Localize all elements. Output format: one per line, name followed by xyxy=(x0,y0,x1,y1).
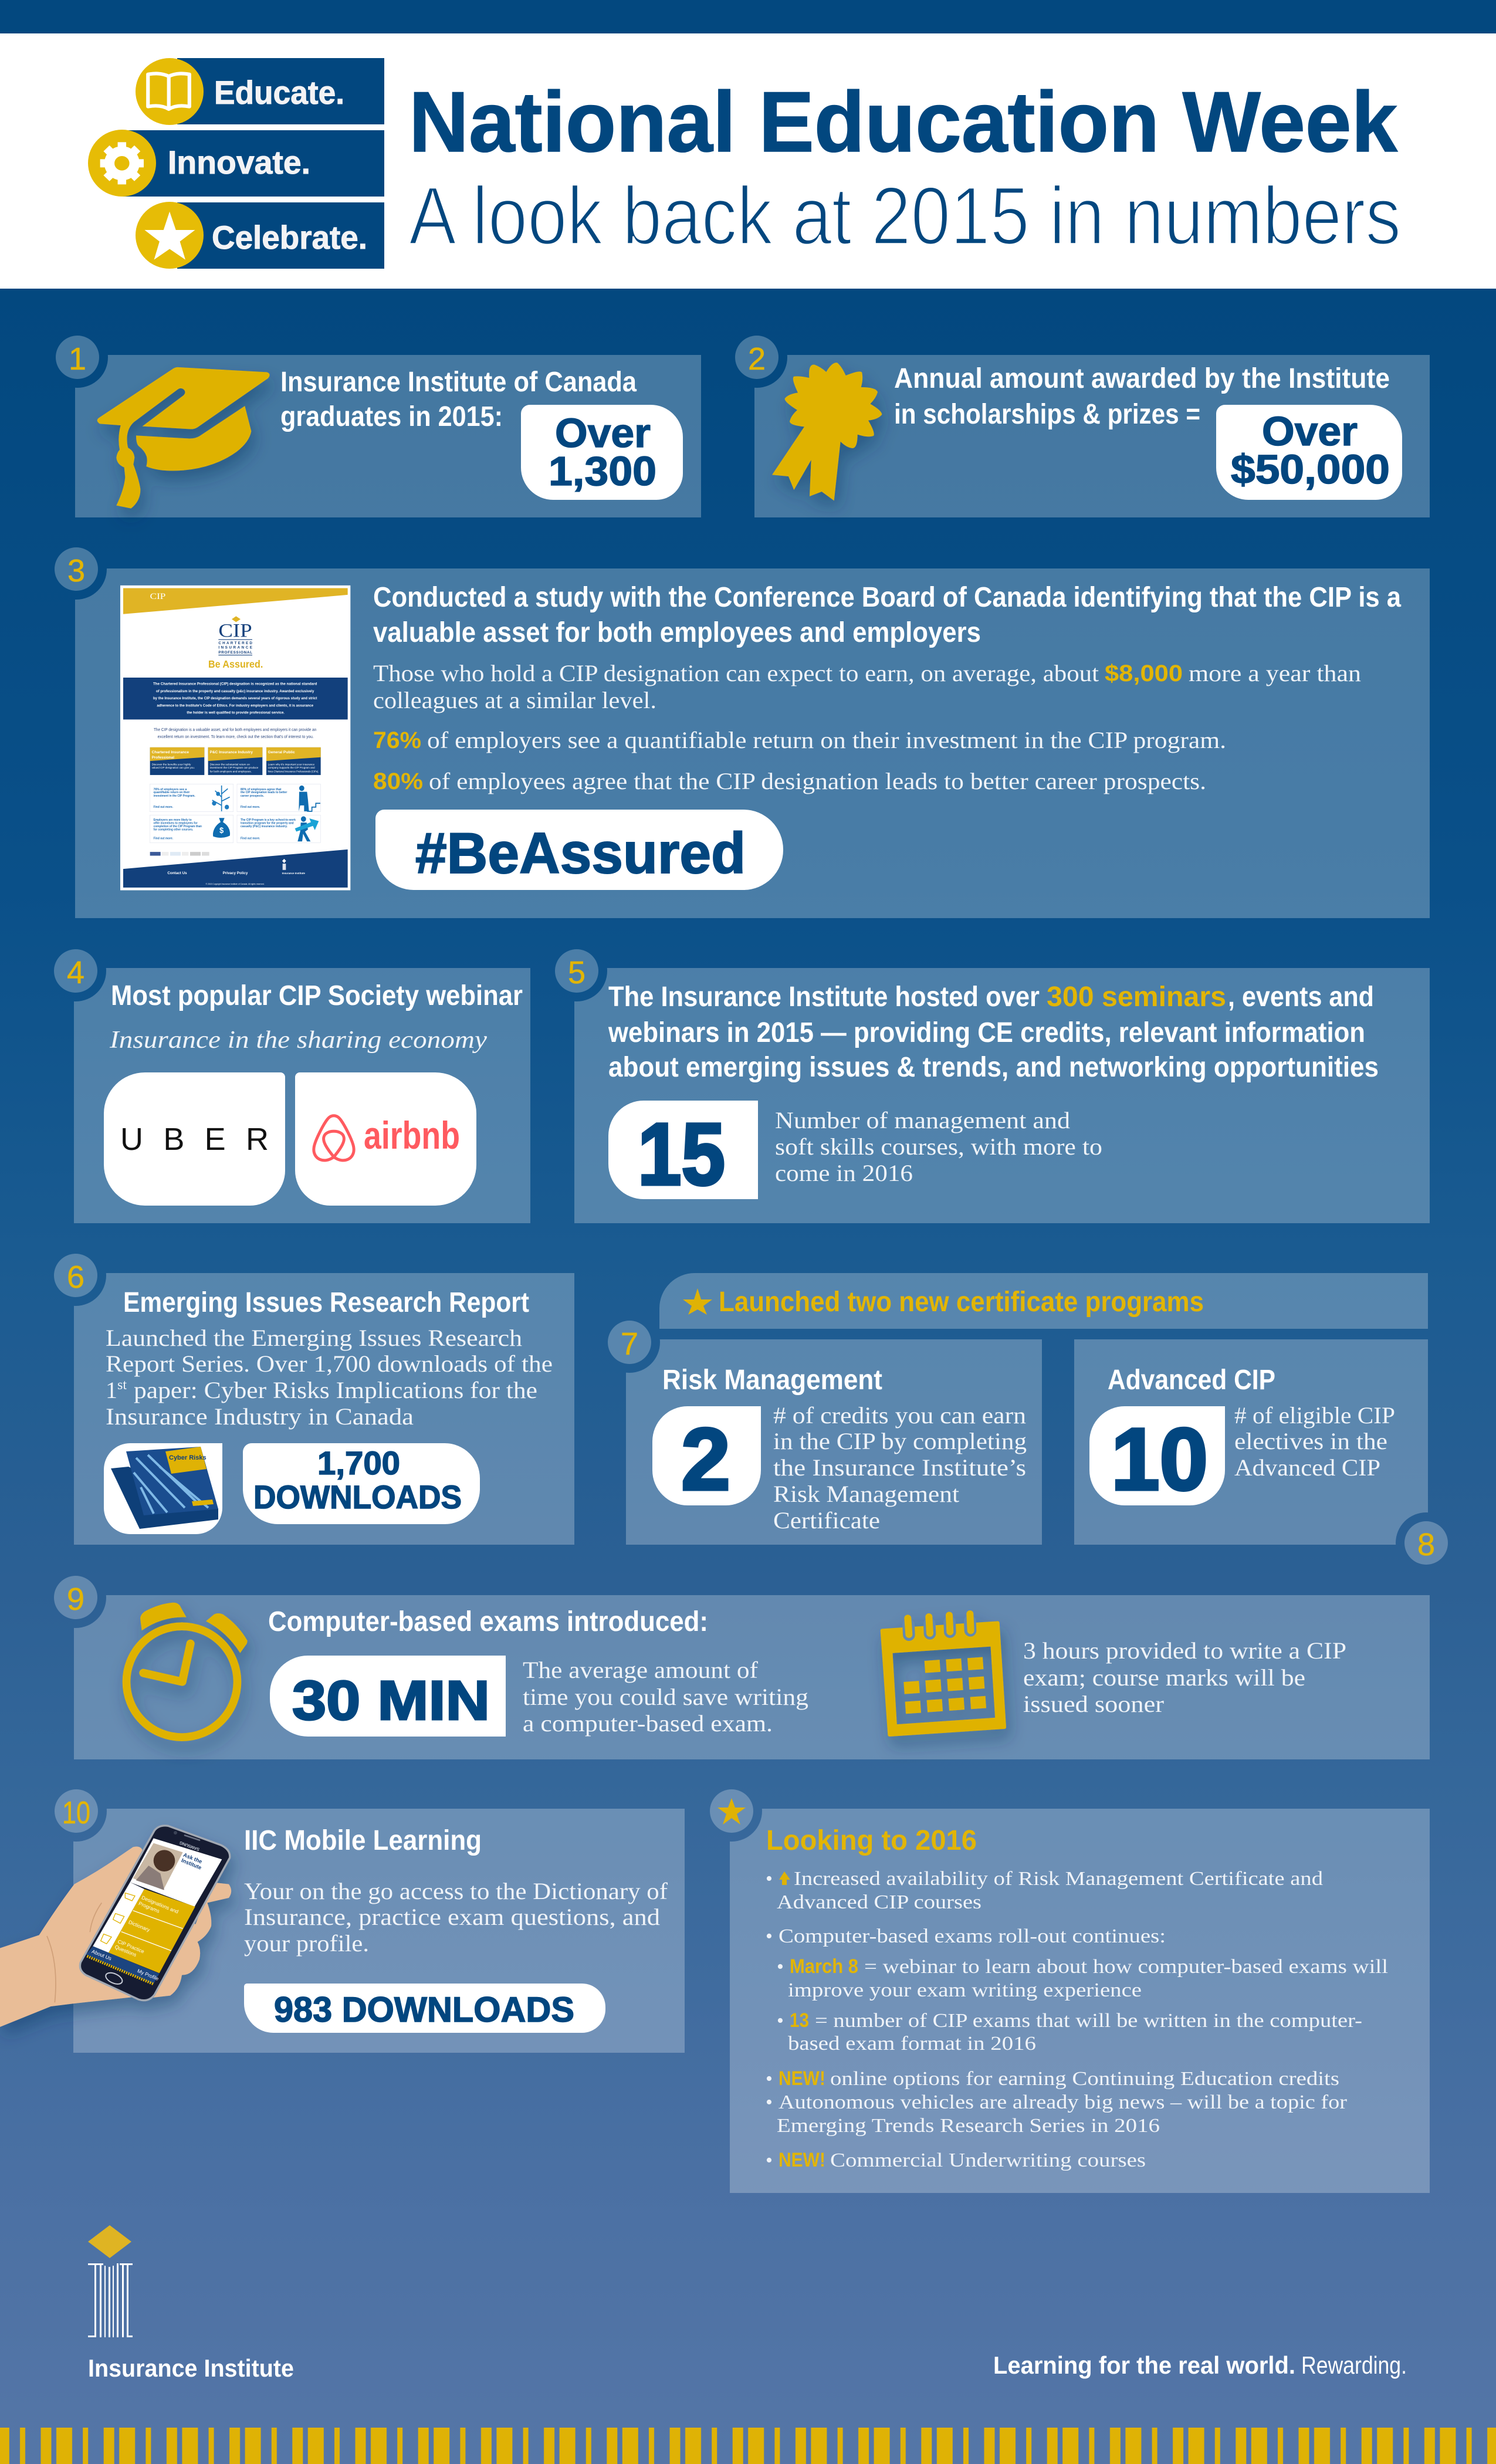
icon: star xyxy=(683,1288,712,1315)
panel 5: seminars: 300 seminars xyxy=(1047,981,1226,1013)
web page thumbnail: Contact Us xyxy=(167,871,187,875)
web page thumbnail: career prospects. xyxy=(241,794,265,798)
web page thumbnail: hires Chartered Insurance Professionals (CIPs). xyxy=(268,770,319,773)
panel 7: risk management xyxy=(599,1312,1042,1545)
panel 3: CIP study xyxy=(46,539,1430,918)
callout: over 1,300 xyxy=(521,405,683,500)
panel 9: computer-based exams: a computer-based exam. xyxy=(523,1710,773,1737)
panel: looking to 2016: Looking to 2016 xyxy=(766,1825,977,1856)
web page thumbnail: PROFESSIONAL xyxy=(218,651,252,655)
panel 5: seminars: about emerging issues & trends, and networking opportunities xyxy=(608,1052,1379,1083)
web page thumbnail: quantifiable return on their xyxy=(154,791,189,794)
tag: Celebrate xyxy=(136,202,384,269)
title: National Education Week xyxy=(409,74,1398,170)
study findings: of employees agree that the CIP designation leads to better career prospects. xyxy=(429,768,1206,794)
callout: over 1,300: Over xyxy=(555,410,651,456)
icon: ribbon xyxy=(772,363,882,500)
bullet list: Advanced CIP courses xyxy=(777,1891,981,1913)
panel 7: risk management: # of credits you can earn xyxy=(773,1402,1026,1429)
logo: Airbnb xyxy=(295,1072,476,1206)
web page thumbnail: offer incentives to employees for xyxy=(154,822,198,825)
panel 9: computer-based exams: 9 xyxy=(67,1582,84,1617)
illustration: hand holding phone: About Us xyxy=(91,1948,113,1962)
panel 5: seminars: Number of management and xyxy=(775,1107,1070,1133)
panel 8: advanced CIP: # of eligible CIP xyxy=(1234,1402,1395,1429)
panel 5: seminars: , events and xyxy=(1228,981,1374,1013)
web page thumbnail: by the Insurance Institute, the CIP designation demands several years of rigorous study and strict xyxy=(153,696,317,700)
panel 8: advanced CIP xyxy=(1074,1339,1457,1573)
web page thumbnail: Insurance Institute xyxy=(282,872,306,875)
bullet list: • xyxy=(766,1868,773,1890)
panel 4: webinar: Most popular CIP Society webinar xyxy=(111,980,523,1011)
study findings: $8,000 xyxy=(1105,661,1183,686)
panel 7: risk management: 7 xyxy=(621,1326,638,1362)
web page thumbnail: investment in the CIP Program. xyxy=(154,794,195,798)
illustration: hand holding phone: CIP Practice xyxy=(117,1938,145,1955)
panel 7: risk management: Risk Management xyxy=(773,1481,959,1507)
barcode stripe band xyxy=(0,2428,1496,2464)
bullet list: • xyxy=(766,1925,773,1947)
panel 6: emerging issues xyxy=(45,1245,574,1545)
panel 8: advanced CIP: electives in the xyxy=(1234,1428,1387,1454)
icon: star xyxy=(717,1798,746,1825)
panel 10: mobile learning: Your on the go access to the Dictionary of xyxy=(244,1878,668,1904)
panel 6: emerging issues: 1 xyxy=(106,1377,117,1403)
web page thumbnail: The Chartered Insurance Professional (CIP) designation is recognized as the national standard xyxy=(153,682,317,686)
panel 6: emerging issues: st xyxy=(117,1377,127,1393)
bullet list: Commercial Underwriting courses xyxy=(830,2150,1146,2171)
web page thumbnail: © 2015 Copyright Insurance Institute of Canada. All rights reserved. xyxy=(206,883,265,885)
panel 9: computer-based exams: Computer-based exams introduced: xyxy=(268,1606,708,1637)
panel 5: seminars: 5 xyxy=(568,955,585,990)
web page thumbnail: INSURANCE xyxy=(218,646,253,650)
study findings: more a year than xyxy=(1189,660,1361,686)
web page thumbnail: The CIP Program is a key school-to-work xyxy=(241,818,296,822)
panel 7: risk management: Certificate xyxy=(773,1507,880,1534)
panel 9: computer-based exams: issued sooner xyxy=(1023,1691,1164,1717)
bullet list: Increased availability of Risk Management Certificate and xyxy=(794,1868,1323,1890)
panel 1: graduates: Insurance Institute of Canada xyxy=(280,367,637,398)
web page thumbnail: Professional xyxy=(152,756,174,760)
panel 4: webinar: 4 xyxy=(67,955,84,990)
illustration: hand holding phone: Programs xyxy=(138,1900,161,1914)
report covers: Cyber Risks xyxy=(169,1454,207,1461)
logo: Insurance Institute: Insurance Institute xyxy=(88,2354,294,2382)
web page thumbnail: of professionalism in the property and casualty (p&c) insurance industry. Awarded exclusively xyxy=(156,689,314,693)
web page thumbnail: P&C Insurance Industry xyxy=(210,750,253,754)
panel 8: advanced CIP: Advanced CIP xyxy=(1108,1365,1275,1396)
web page thumbnail: Discover the substantial return on xyxy=(210,763,251,766)
web page thumbnail: Chartered Insurance xyxy=(152,750,189,754)
panel 5: seminars: soft skills courses, with more to xyxy=(775,1133,1102,1160)
study findings: colleagues at a similar level. xyxy=(373,687,656,713)
web page thumbnail: excellent return on investment. To learn more, check out the section that's of interest to you. xyxy=(158,735,314,739)
callout: #BeAssured: #BeAssured xyxy=(415,821,746,885)
panel 9: computer-based exams: 3 hours provided to write a CIP xyxy=(1023,1637,1346,1664)
callout: 1,700 downloads: DOWNLOADS xyxy=(253,1478,462,1515)
illustration: hand holding phone xyxy=(0,1826,231,2027)
banner: new certificate programs: Launched two new certificate programs xyxy=(719,1287,1204,1318)
web page thumbnail: Be Assured. xyxy=(208,659,263,670)
web page thumbnail: The CIP designation is a valuable asset, and for both employees and employers it can provide an xyxy=(154,728,316,732)
icon: graduation cap xyxy=(97,367,270,509)
panel 2: scholarships: 2 xyxy=(748,341,766,377)
panel 6: emerging issues: Emerging Issues Research Report xyxy=(123,1287,529,1318)
bullet list: • xyxy=(777,1956,784,1978)
panel 5: seminars xyxy=(546,940,1430,1223)
web page thumbnail: Privacy Policy xyxy=(223,871,248,875)
callout: over 1,300: 1,300 xyxy=(549,448,656,494)
illustration: hand holding phone: My Profile xyxy=(137,1968,160,1982)
bullet list: online options for earning Continuing Education credits xyxy=(830,2068,1339,2090)
web page thumbnail: adherence to the Institute's Code of Ethics. For industry employers and clients, it is assurance xyxy=(157,703,313,708)
panel 8: advanced CIP: Advanced CIP xyxy=(1234,1454,1380,1481)
panel: looking to 2016 xyxy=(701,1781,1430,2193)
callout: 1,700 downloads xyxy=(243,1443,480,1524)
panel 6: emerging issues: paper: Cyber Risks Implications for the xyxy=(134,1377,537,1403)
panel 4: webinar xyxy=(45,940,530,1223)
callout: 10: 10 xyxy=(1111,1410,1208,1508)
web page thumbnail: for both employers and employees. xyxy=(210,770,252,773)
bullet list xyxy=(766,1868,1388,2171)
bullet list: = webinar to learn about how computer-based exams will xyxy=(864,1956,1388,1978)
bullet list: based exam format in 2016 xyxy=(788,2033,1036,2055)
tag: Innovate: Innovate. xyxy=(168,144,310,181)
web page thumbnail: Find out more. xyxy=(241,805,260,809)
illustration: hand holding phone: Questions xyxy=(114,1944,138,1958)
web page thumbnail: CHARTERED xyxy=(218,641,252,645)
web page thumbnail: CIP xyxy=(150,592,166,601)
bullet list: Emerging Trends Research Series in 2016 xyxy=(777,2115,1160,2137)
panel 3: CIP study: 3 xyxy=(67,553,85,588)
web page thumbnail: Find out more. xyxy=(154,837,174,840)
study findings: 80% xyxy=(373,769,423,794)
study findings: of employers see a quantifiable return on their investment in the CIP program. xyxy=(427,727,1226,753)
bullet list: • xyxy=(766,2068,773,2090)
web page thumbnail: the holder is well qualified to provide professional service. xyxy=(187,710,285,715)
web page thumbnail: Find out more. xyxy=(154,805,174,809)
callout: over $50,000 xyxy=(1216,405,1402,500)
study findings: 76% xyxy=(373,727,421,753)
panel 7: risk management: Risk Management xyxy=(662,1365,882,1396)
panel 10: mobile learning xyxy=(0,1781,685,2053)
bullet list: = number of CIP exams that will be written in the computer- xyxy=(815,2010,1362,2032)
panel 1: graduates: graduates in 2015: xyxy=(280,401,503,432)
panel 10: mobile learning: IIC Mobile Learning xyxy=(244,1825,482,1856)
web page thumbnail: General Public xyxy=(268,750,295,754)
heading: valuable asset for both employees and employers xyxy=(373,617,981,648)
bullet list: • xyxy=(766,2091,773,2113)
illustration: hand holding phone: SAMSUNG xyxy=(178,1840,200,1852)
illustration: hand holding phone: Institute xyxy=(181,1857,202,1871)
panel 2: scholarships: in scholarships & prizes = xyxy=(894,399,1200,430)
header band xyxy=(0,33,1496,289)
bullet list: NEW! xyxy=(779,2149,825,2171)
banner: new certificate programs xyxy=(659,1273,1428,1329)
logo: Uber xyxy=(104,1072,285,1206)
callout: 2 xyxy=(652,1406,761,1508)
panel 9: computer-based exams: time you could save writing xyxy=(523,1684,808,1710)
illustration: hand holding phone: Ask the xyxy=(182,1852,203,1864)
heading: Conducted a study with the Conference Board of Canada identifying that the CIP is a xyxy=(373,582,1401,613)
web page thumbnail: Learn why it's important your insurance xyxy=(268,763,315,766)
web page thumbnail: completion of the CIP Program than xyxy=(154,825,202,828)
panel 7: risk management: the Insurance Institute’s xyxy=(773,1454,1026,1481)
callout: 15 xyxy=(608,1101,758,1203)
panel 2: scholarships: Annual amount awarded by the Institute xyxy=(894,363,1390,394)
callout: 2: 2 xyxy=(681,1410,730,1508)
logo: Airbnb: airbnb xyxy=(364,1113,460,1157)
web page thumbnail: transition program for the property and xyxy=(241,822,294,825)
panel 5: seminars: The Insurance Institute hosted over xyxy=(608,981,1040,1013)
web page thumbnail: Discover the benefits your highly xyxy=(152,763,191,766)
panel 10: mobile learning: your profile. xyxy=(244,1930,369,1957)
web page thumbnail xyxy=(120,585,350,890)
panel 7: risk management: in the CIP by completing xyxy=(773,1428,1027,1454)
callout: 983 downloads: 983 DOWNLOADS xyxy=(274,1990,574,2029)
web page thumbnail: 76% of employers see a xyxy=(154,788,187,791)
panel 1: graduates: 1 xyxy=(69,341,86,377)
callout: over $50,000: $50,000 xyxy=(1231,446,1390,492)
web page thumbnail: company supports the CIP Program and xyxy=(268,766,315,769)
tagline: Rewarding. xyxy=(1301,2351,1407,2379)
panel 6: emerging issues: Insurance Industry in Canada xyxy=(106,1403,414,1430)
icon: alarm clock xyxy=(126,1603,248,1737)
tag: Educate xyxy=(136,58,384,125)
logo: Uber: UBER xyxy=(120,1122,269,1157)
study findings: Those who hold a CIP designation can expect to earn, on average, about xyxy=(373,660,1099,686)
report covers xyxy=(104,1443,222,1534)
panel 6: emerging issues: Launched the Emerging Issues Research xyxy=(106,1325,522,1351)
panel 6: emerging issues: Report Series. Over 1,700 downloads of the xyxy=(106,1351,553,1377)
panel 9: computer-based exams: exam; course marks will be xyxy=(1023,1664,1305,1691)
bullet list: • xyxy=(777,2010,784,2032)
callout: 30 min: 30 MIN xyxy=(292,1670,490,1732)
panel 6: emerging issues: 6 xyxy=(67,1260,84,1295)
bullet list: Autonomous vehicles are already big news – will be a topic for xyxy=(779,2091,1348,2113)
web page thumbnail: valued CIP designation can give you. xyxy=(152,766,195,769)
panel 10: mobile learning: 10 xyxy=(62,1795,90,1830)
bullet list: improve your exam writing experience xyxy=(788,1979,1142,2001)
bullet list: March 8 xyxy=(790,1955,858,1978)
callout: 15: 15 xyxy=(638,1105,725,1203)
web page thumbnail: for completing other courses. xyxy=(154,828,194,832)
panel 2: scholarships xyxy=(726,327,1430,517)
bullet list: 13 xyxy=(790,2009,809,2032)
illustration: hand holding phone: Dictionary xyxy=(128,1919,151,1933)
study findings xyxy=(373,660,1361,794)
callout: 983 downloads xyxy=(244,1984,605,2033)
panel 10: mobile learning: Insurance, practice exam questions, and xyxy=(244,1904,660,1930)
tag: Educate: Educate. xyxy=(214,74,344,111)
illustration: hand holding phone: Designations and xyxy=(141,1894,180,1915)
bullet list: Computer-based exams roll-out continues: xyxy=(779,1925,1166,1947)
callout: 1,700 downloads: 1,700 xyxy=(317,1444,400,1481)
web page thumbnail: the CIP designation leads to better xyxy=(241,791,287,794)
callout: 30 min xyxy=(270,1656,506,1737)
callout: #BeAssured xyxy=(375,810,783,890)
panel 5: seminars: come in 2016 xyxy=(775,1160,913,1186)
panel 9: computer-based exams xyxy=(45,1567,1430,1759)
panel 1: graduates xyxy=(47,327,701,517)
web page thumbnail: Employers are more likely to xyxy=(154,818,192,822)
web page thumbnail: CIP xyxy=(218,620,252,641)
tag: Innovate xyxy=(88,130,384,197)
panel 5: seminars: webinars in 2015 — providing CE credits, relevant information xyxy=(608,1017,1365,1048)
web page thumbnail: investment the CIP Program can produce xyxy=(210,766,259,769)
web page thumbnail: $ xyxy=(219,826,224,835)
panel 4: webinar: Insurance in the sharing economy xyxy=(109,1027,487,1054)
tag: Celebrate: Celebrate. xyxy=(212,219,367,256)
icon: calendar xyxy=(882,1614,1004,1735)
callout: 10 xyxy=(1089,1406,1225,1508)
heading xyxy=(373,582,1401,648)
panel 9: computer-based exams: The average amount of xyxy=(523,1657,759,1683)
web page thumbnail: 80% of employees agree that xyxy=(241,788,282,791)
bullet list: • xyxy=(766,2150,773,2171)
web page thumbnail: Find out more. xyxy=(241,837,260,840)
panel 8: advanced CIP: 8 xyxy=(1417,1527,1435,1562)
callout: over $50,000: Over xyxy=(1262,408,1358,454)
web page thumbnail: casualty (P&C) insurance industry. xyxy=(241,825,288,828)
tagline: Learning for the real world. xyxy=(993,2351,1295,2379)
logo: Insurance Institute xyxy=(88,2225,294,2382)
bullet list: NEW! xyxy=(779,2067,825,2090)
